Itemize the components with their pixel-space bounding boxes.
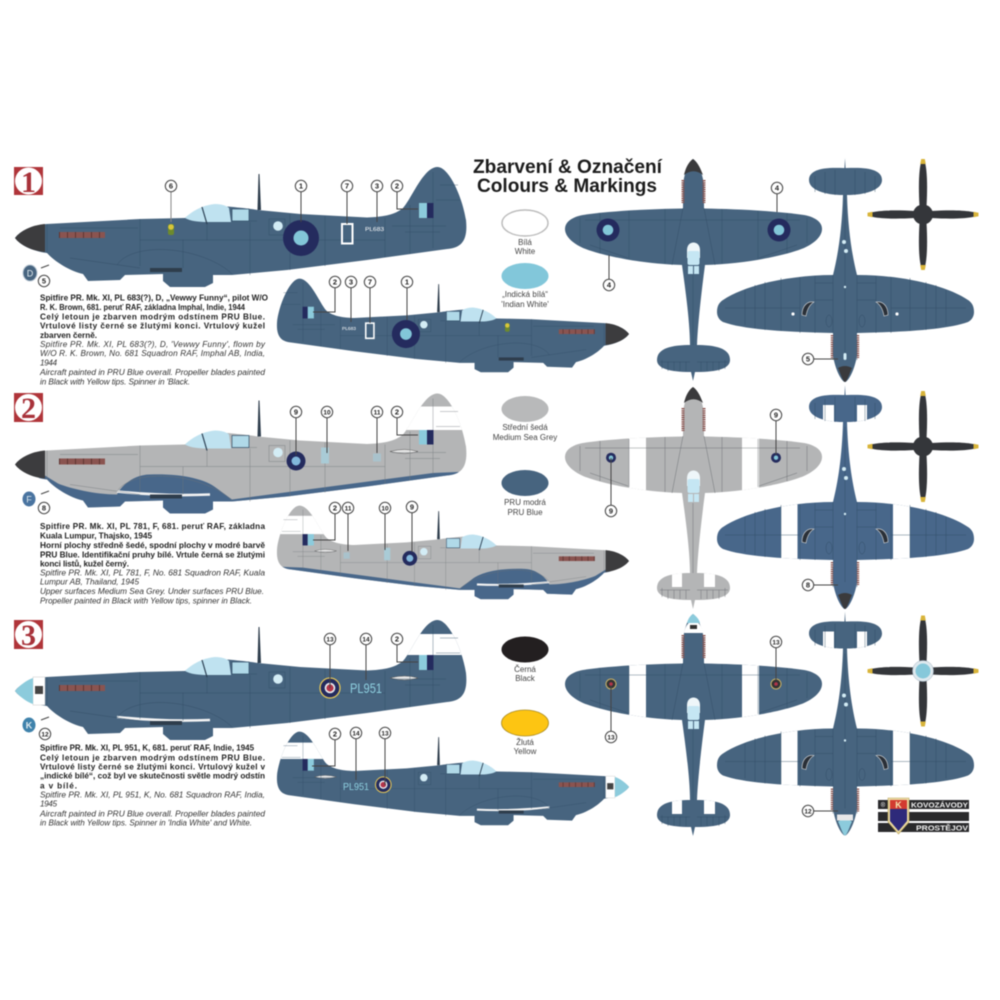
callouts: scheme 2: 8: [806, 581, 810, 590]
callouts: scheme 1: 5: [42, 277, 46, 286]
text block: scheme 3 description: „indické bílé“, což byl ve skutečnosti světle modrý odstín: [40, 771, 265, 780]
text block: scheme 3 description: Celý letoun je zbarven modrým odstínem PRU Blue.: [40, 754, 265, 763]
text block: scheme 2 description: Propeller painted in Black with Yellow tips, spinner in Black.: [40, 596, 252, 605]
aircraft 3 side view small: PL951: [343, 781, 369, 793]
callouts: scheme 2: 10: [381, 506, 389, 512]
text block: scheme 2 description: Kuala Lumpur, Thajsko, 1945: [40, 531, 152, 540]
aircraft 3 top view: [565, 614, 822, 836]
callouts: scheme 2: 8: [42, 504, 46, 513]
colour swatch: black: Černá: [514, 665, 536, 674]
text block: scheme 2 description: konci listů, kužel černý.: [40, 558, 129, 568]
text block: scheme 2 description: Lumpur AB, Thailand, 1945: [40, 578, 139, 587]
aircraft 2 underside view: [717, 385, 974, 609]
callouts: scheme 1: 7: [368, 278, 372, 287]
text block: scheme 1 description: Vrtulové listy černé se žlutými konci. Vrtulový kužel: [40, 321, 265, 330]
callouts: scheme 2: [22, 406, 838, 591]
text block: scheme 1 description: R. K. Brown, 681. peruť RAF, základna Imphal, Indie, 1944: [40, 303, 245, 312]
colour swatch: black: Black: [515, 674, 536, 683]
propeller 2: [868, 391, 978, 502]
text block: scheme 3 description: Spitfire PR. Mk. XI, PL 951, K, No. 681 Squadron RAF, India,: [40, 790, 265, 799]
aircraft 3 underside view: [717, 612, 974, 836]
logo: Kovozávody Prostějov: ®: [881, 802, 886, 809]
text block: scheme 1 description: [39, 294, 269, 387]
callouts: scheme 2: 9: [410, 503, 414, 512]
callouts: scheme 1: D: [27, 268, 34, 278]
text block: scheme 1 description: in Black with Yellow tips. Spinner in 'Black.: [40, 378, 190, 387]
callouts: scheme 3: 13: [326, 636, 334, 644]
callouts: scheme 3: 12: [41, 732, 49, 738]
text block: scheme 2 description: PRU Blue. Identifikační pruhy bílé. Vrtule černá se žlutými: [40, 550, 265, 559]
callouts: scheme 1: [23, 180, 838, 365]
callouts: scheme 2: 9: [609, 507, 613, 516]
colour swatch: black: [502, 636, 548, 683]
text block: scheme 2 description: Spitfire PR. Mk. XI, PL 781, F, No. 681 Squadron RAF, Kuala: [40, 569, 265, 578]
aircraft 2 top view: [565, 387, 822, 609]
aircraft 2 side view large: [15, 393, 470, 526]
callouts: scheme 3: 12: [804, 808, 812, 816]
colour swatch: medium sea grey: [493, 396, 557, 442]
aircraft 1 top view: [565, 159, 822, 381]
colour swatch: white: White: [515, 247, 536, 256]
colour swatch: white: [502, 210, 548, 256]
text block: scheme 3 description: 1945: [40, 800, 57, 809]
callouts: scheme 2: 10: [323, 410, 331, 416]
text block: scheme 1 description: Celý letoun je zbarven modrým odstínem PRU Blue.: [40, 312, 265, 321]
colour swatch: yellow: [502, 710, 548, 756]
text block: scheme 1 description: Aircraft painted in PRU Blue overall. Propeller blades painted: [39, 368, 265, 377]
text block: scheme 3 description: Vrtulové listy černé se žlutými konci. Vrtulový kužel v: [40, 762, 265, 771]
callouts: scheme 3: 2: [395, 635, 399, 644]
callouts: scheme 1: 4: [607, 281, 612, 290]
badge: scheme 2: [14, 392, 43, 425]
colour swatch: medium sea grey: Střední šedá: [502, 423, 548, 432]
aircraft 3 side view large: [15, 620, 470, 740]
text block: scheme 2 description: [40, 522, 265, 605]
aircraft 3 side view large: PL951: [350, 680, 382, 696]
text block: scheme 2 description: Upper surfaces Medium Sea Grey. Under surfaces PRU Blue.: [40, 587, 264, 596]
callouts: scheme 2: 11: [374, 410, 381, 416]
logo: Kovozávody Prostějov: PROSTĚJOV: [916, 823, 968, 832]
aircraft 1 side view large: [15, 167, 466, 287]
text block: scheme 1 description: 1944: [40, 359, 57, 368]
aircraft 1 side view small: [277, 279, 629, 372]
badge: scheme 3: 3: [21, 619, 36, 652]
colour swatch: yellow: Yellow: [514, 747, 537, 756]
text block: scheme 3 description: Aircraft painted in PRU Blue overall. Propeller blades painted: [39, 809, 265, 818]
callouts: scheme 1: 1: [299, 182, 303, 191]
colour swatch: Indian white: 'Indian White': [501, 300, 549, 309]
callouts: scheme 2: 2: [395, 408, 399, 417]
callouts: scheme 2: 2: [333, 504, 337, 513]
logo: Kovozávody Prostějov: KOVOZÁVODY: [911, 800, 968, 809]
title: Zbarvení & Označení: [473, 157, 663, 178]
colour swatch: Indian white: [501, 263, 549, 309]
aircraft 1 side view large: PL683: [365, 227, 384, 233]
colour swatch: yellow: Žlutá: [516, 738, 534, 747]
callouts: scheme 1: 5: [806, 355, 810, 364]
text block: scheme 3 description: [39, 744, 265, 828]
badge: scheme 2: 2: [21, 392, 36, 425]
callouts: scheme 3: 14: [362, 636, 370, 644]
callouts: scheme 3: [22, 633, 838, 817]
callouts: scheme 1: 3: [375, 182, 379, 191]
callouts: scheme 1: 4: [775, 184, 780, 193]
text block: scheme 1 description: Spitfire PR. Mk. XI, PL 683(?), D, „Vewwy Funny“, pilot W/O: [40, 294, 269, 303]
text block: scheme 1 description: Spitfire PR. Mk. XI, PL 683(?), D, 'Vewwy Funny', flown by: [40, 340, 266, 349]
badge: scheme 1: 1: [21, 166, 36, 199]
callouts: scheme 3: 14: [352, 730, 360, 738]
colour swatch: PRU blue: PRU modrá: [504, 498, 546, 507]
callouts: scheme 1: 1: [405, 278, 409, 287]
text block: scheme 3 description: a v bílé.: [40, 781, 77, 790]
title: [473, 157, 663, 197]
callouts: scheme 1: 3: [349, 278, 353, 287]
colour swatch: white: Bílá: [518, 238, 532, 247]
aircraft 1 underside view: [717, 158, 974, 382]
badge: scheme 1: [14, 166, 43, 199]
callouts: scheme 1: 2: [333, 278, 337, 287]
title: Colours & Markings: [477, 176, 657, 197]
callouts: scheme 2: 9: [294, 408, 298, 417]
callouts: scheme 2: 11: [345, 506, 352, 512]
callouts: scheme 3: 13: [381, 730, 389, 738]
callouts: scheme 2: F: [26, 494, 32, 504]
colour swatch: PRU blue: PRU Blue: [507, 508, 543, 517]
callouts: scheme 3: 13: [607, 734, 615, 742]
text block: scheme 2 description: Spitfire PR. Mk. XI, PL 781, F, 681. peruť RAF, základna: [40, 522, 265, 531]
logo: Kovozávody Prostějov: [878, 798, 969, 834]
colour swatch: Indian white: „Indická bílá“: [502, 290, 548, 299]
callouts: scheme 1: 6: [169, 182, 173, 191]
text block: scheme 1 description: W/O R. K. Brown, No. 681 Squadron RAF, Imphal AB, India,: [40, 349, 265, 358]
propeller 3: [868, 616, 978, 726]
aircraft 1 side view small: PL683: [342, 326, 357, 331]
text block: scheme 3 description: in Black with Yellow tips. Spinner in 'India White' and White.: [40, 819, 252, 828]
aircraft 2 side view small: [274, 506, 629, 609]
badge: scheme 3: [14, 619, 43, 652]
text block: scheme 2 description: Horní plochy středně šedé, spodní plochy v modré barvě: [40, 541, 265, 550]
callouts: scheme 3: 2: [333, 730, 337, 739]
propeller 1: [868, 159, 978, 270]
callouts: scheme 1: 2: [395, 182, 399, 191]
text block: scheme 3 description: Spitfire PR. Mk. XI, PL 951, K, 681. peruť RAF, Indie, 1945: [40, 744, 254, 753]
colour swatch: PRU blue: [502, 470, 548, 517]
logo: Kovozávody Prostějov: K: [895, 800, 902, 810]
callouts: scheme 2: 9: [774, 411, 778, 420]
aircraft 3 side view small: [274, 732, 629, 825]
text block: scheme 1 description: zbarven černě.: [40, 331, 97, 340]
callouts: scheme 3: 13: [772, 640, 780, 646]
callouts: scheme 3: K: [26, 720, 33, 730]
callouts: scheme 1: 7: [345, 182, 349, 191]
colour swatch: medium sea grey: Medium Sea Grey: [493, 433, 557, 442]
